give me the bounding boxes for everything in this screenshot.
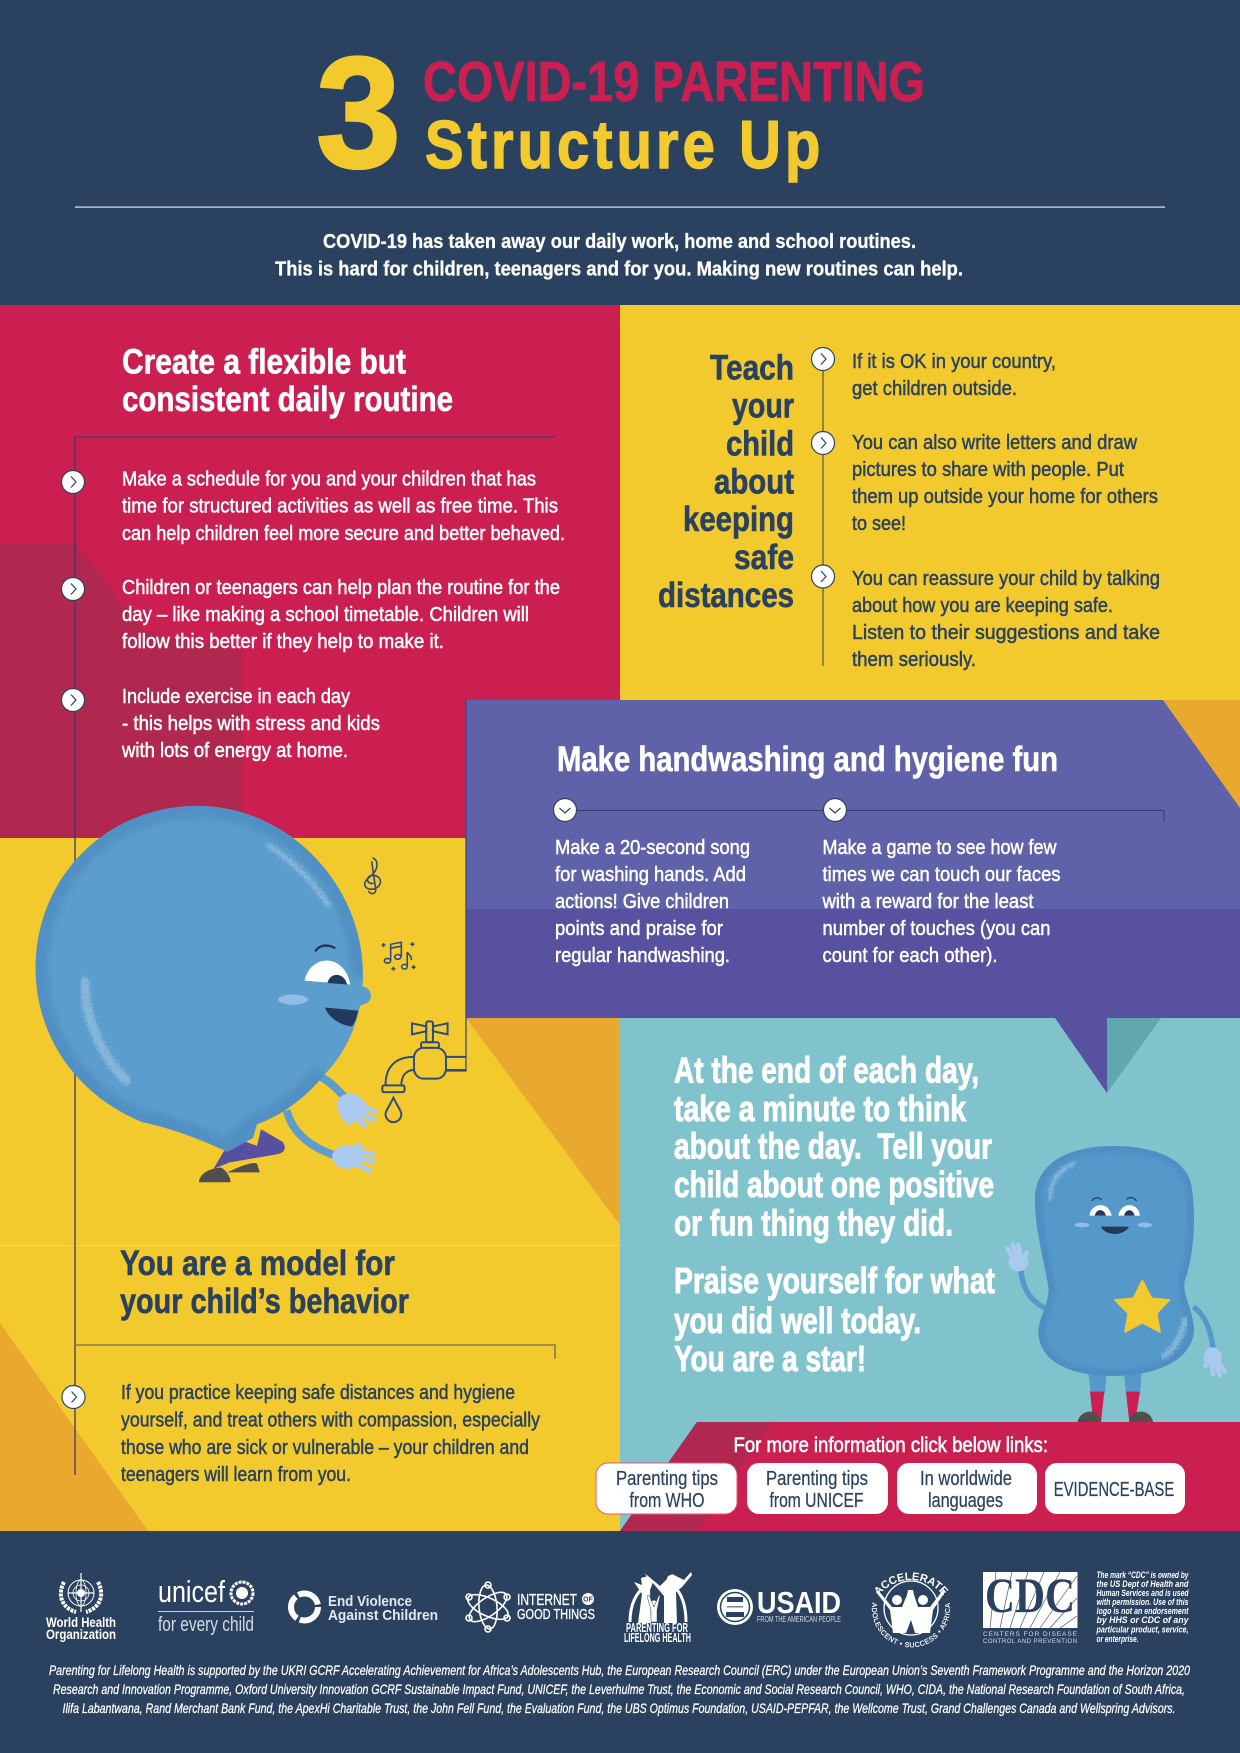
button: UNICEF: [747, 1463, 888, 1514]
button: languages: [897, 1463, 1037, 1514]
button: WHO: from WHO: [630, 1489, 704, 1512]
title: [316, 25, 925, 201]
button: languages: In worldwide: [920, 1467, 1012, 1490]
heading: teach safe distances: your: [732, 386, 794, 426]
reflection message: At the end of each day,: [674, 1050, 979, 1090]
safe distance tip 2: You can also write letters and draw: [852, 431, 1137, 454]
safe distance tip 2: [812, 431, 1158, 535]
handwashing tip 2: with a reward for the least: [822, 890, 1034, 913]
heading: teach safe distances: child: [726, 424, 794, 464]
safe distance tip 3: them seriously.: [852, 648, 976, 671]
footer band: [0, 1531, 1240, 1753]
routine tip 1: [62, 468, 565, 545]
logo: Accelerate: ACCELERATE: [875, 1572, 948, 1596]
logo: World Health Organization: World Health: [46, 1614, 116, 1630]
heading: teach safe distances: [658, 348, 794, 615]
routine tip 3: - this helps with stress and kids: [122, 712, 380, 735]
logo: End Violence Against Children: End Violence: [328, 1593, 412, 1610]
model behaviour text: teenagers will learn from you.: [121, 1463, 351, 1486]
logo: Parenting for Lifelong Health: [624, 1572, 692, 1645]
panel: handwashing: [446, 700, 1240, 1093]
heading: teach safe distances: safe: [734, 538, 794, 577]
panel: safe distances background: [620, 305, 1240, 700]
reflection message: child about one positive: [674, 1164, 994, 1205]
handwashing tip 1: Make a 20-second song: [555, 836, 750, 859]
logo: Internet of Good Things: OF: [583, 1596, 594, 1604]
model behaviour text: those who are sick or vulnerable – your children and: [121, 1436, 529, 1459]
button: WHO: Parenting tips: [616, 1467, 718, 1490]
logo: Internet of Good Things: GOOD THINGS: [517, 1606, 595, 1623]
logo: World Health Organization: [46, 1573, 116, 1642]
logo: Parenting for Lifelong Health: LIFELONG HEALTH: [624, 1631, 691, 1645]
logo: CDC: CENTERS FOR DISEASE: [983, 1631, 1078, 1638]
intro text: [275, 230, 963, 280]
CDC disclaimer: or enterprise.: [1096, 1634, 1138, 1645]
illustration: round blue character washing hands: [36, 806, 375, 1182]
routine tip 1: Make a schedule for you and your children that has: [122, 468, 536, 490]
CDC disclaimer: particular product, service,: [1096, 1624, 1188, 1636]
title: Structure Up: [425, 108, 820, 183]
button: WHO: [596, 1463, 737, 1514]
safe distance tip 3: Listen to their suggestions and take: [852, 621, 1160, 644]
handwashing tip 2: Make a game to see how few: [822, 836, 1057, 859]
illustration: star character: [1007, 1146, 1225, 1423]
heading: daily routine: [122, 342, 453, 419]
heading: handwashing: Make handwashing and hygiene fun: [557, 740, 1058, 779]
routine tip 2: follow this better if they help to make it.: [122, 630, 444, 653]
CDC disclaimer: logo is not an endorsement: [1096, 1606, 1189, 1617]
heading: daily routine: Create a flexible but: [122, 342, 406, 382]
logo: UNICEF: unicef: [158, 1574, 225, 1609]
logo: USAID: USAID: [757, 1585, 841, 1620]
safe distance tip 2: to see!: [852, 512, 906, 535]
logo: USAID: [717, 1585, 841, 1625]
reflection message: take a minute to think: [674, 1088, 967, 1129]
heading: teach safe distances: Teach: [710, 348, 794, 388]
heading: teach safe distances: about: [714, 462, 794, 502]
CDC disclaimer: with permission. Use of this: [1096, 1597, 1188, 1608]
reflection message: or fun thing they did.: [674, 1202, 953, 1244]
heading: model behaviour: [120, 1244, 409, 1321]
routine tip 1: time for structured activities as well as free time. This: [122, 494, 558, 518]
handwashing tip 2: [822, 798, 1060, 967]
button: evidence base: [1045, 1463, 1185, 1514]
handwashing tip 1: actions! Give children: [555, 890, 729, 913]
button: languages: languages: [928, 1489, 1003, 1512]
reflection message: about the day. Tell your: [674, 1126, 992, 1166]
logo: Parenting for Lifelong Health: PARENTING FOR: [626, 1621, 688, 1635]
model behaviour text: [62, 1381, 541, 1486]
safe distance tip 2: pictures to share with people. Put: [852, 458, 1124, 481]
reflection message: You are a star!: [674, 1338, 866, 1379]
title: 3: [316, 25, 401, 201]
heading: model behaviour: your child’s behavior: [120, 1282, 409, 1321]
intro text: This is hard for children, teenagers and for you. Making new routines can help.: [275, 258, 963, 280]
panel: model background: [0, 838, 620, 1531]
button: UNICEF: from UNICEF: [770, 1489, 864, 1512]
logo: CDC: [983, 1567, 1078, 1645]
logo: End Violence Against Children: Against Children: [328, 1607, 438, 1624]
heading: daily routine: consistent daily routine: [122, 380, 453, 419]
icon: water tap: [382, 1021, 466, 1122]
logo: Internet of Good Things: INTERNET: [517, 1592, 577, 1609]
funding credits: [49, 1662, 1190, 1716]
routine tip 3: Include exercise in each day: [122, 685, 351, 708]
logo: CDC: CDC: [985, 1567, 1075, 1623]
logo: Accelerate: ADOLESCENT • SUCCESS • AFRICA: [872, 1602, 950, 1648]
reflection message: you did well today.: [674, 1300, 921, 1341]
reflection message: [674, 1050, 995, 1379]
handwashing tip 2: times we can touch our faces: [822, 863, 1060, 886]
routine tip 2: day – like making a school timetable. Children will: [122, 603, 529, 626]
header band: [0, 0, 1240, 305]
heading: teach safe distances: keeping: [683, 500, 794, 539]
routine tip 1: can help children feel more secure and better behaved.: [122, 522, 565, 545]
routine tip 2: Children or teenagers can help plan the routine for the: [122, 576, 560, 599]
links band: [596, 1422, 1240, 1531]
logo: USAID: FROM THE AMERICAN PEOPLE: [757, 1614, 841, 1624]
safe distance tip 1: If it is OK in your country,: [852, 350, 1056, 373]
routine tip 2: [62, 576, 560, 653]
CDC disclaimer: by HHS or CDC of any: [1096, 1615, 1189, 1626]
model behaviour text: If you practice keeping safe distances and hygiene: [121, 1381, 515, 1404]
CDC disclaimer: [1096, 1570, 1189, 1645]
icon: treble clef: [365, 858, 380, 894]
icon: music notes: [382, 942, 416, 971]
heading: teach safe distances: distances: [658, 576, 794, 615]
safe distance tip 3: about how you are keeping safe.: [852, 594, 1113, 617]
handwashing tip 1: for washing hands. Add: [555, 863, 746, 886]
handwashing tip 1: [554, 798, 750, 967]
logo: UNICEF: [158, 1574, 254, 1636]
CDC disclaimer: Human Services and is used: [1096, 1588, 1189, 1599]
CDC disclaimer: The mark “CDC” is owned by: [1096, 1570, 1189, 1581]
logo: World Health Organization: Organization: [46, 1626, 116, 1642]
logo: End Violence Against Children: [291, 1593, 438, 1624]
safe distance tip 3: You can reassure your child by talking: [852, 567, 1160, 590]
title: COVID-19 PARENTING: [423, 50, 925, 114]
handwashing tip 2: count for each other).: [822, 944, 998, 967]
logo: Internet of Good Things: [464, 1582, 595, 1632]
logo: CDC: CONTROL AND PREVENTION: [983, 1639, 1077, 1645]
panel: reflection background: [620, 1018, 1240, 1531]
button: evidence base: EVIDENCE-BASE: [1054, 1478, 1174, 1501]
button: UNICEF: Parenting tips: [766, 1467, 868, 1490]
safe distance tip 1: get children outside.: [852, 377, 1017, 400]
model behaviour text: yourself, and treat others with compassion, especially: [121, 1408, 541, 1432]
handwashing tip 1: points and praise for: [555, 917, 723, 940]
safe distance tip 1: [812, 348, 1056, 400]
safe distance tip 3: [812, 565, 1160, 671]
intro text: COVID-19 has taken away our daily work, home and school routines.: [323, 230, 916, 253]
panel: routine background: [0, 305, 620, 838]
reflection message: Praise yourself for what: [674, 1260, 995, 1301]
vertical timeline: [75, 437, 554, 1475]
CDC disclaimer: the US Dept of Health and: [1096, 1579, 1189, 1590]
links heading: For more information click below links:: [734, 1434, 1048, 1457]
routine tip 3: with lots of energy at home.: [121, 739, 348, 762]
routine tip 3: [62, 685, 380, 762]
handwashing tip 1: regular handwashing.: [555, 944, 730, 967]
handwashing tip 2: number of touches (you can: [822, 917, 1050, 940]
logo: UNICEF: for every child: [158, 1614, 254, 1636]
safe distances timeline: [822, 350, 824, 666]
logo: Accelerate: [872, 1572, 950, 1648]
heading: model behaviour: You are a model for: [120, 1244, 395, 1283]
safe distance tip 2: them up outside your home for others: [852, 485, 1158, 508]
